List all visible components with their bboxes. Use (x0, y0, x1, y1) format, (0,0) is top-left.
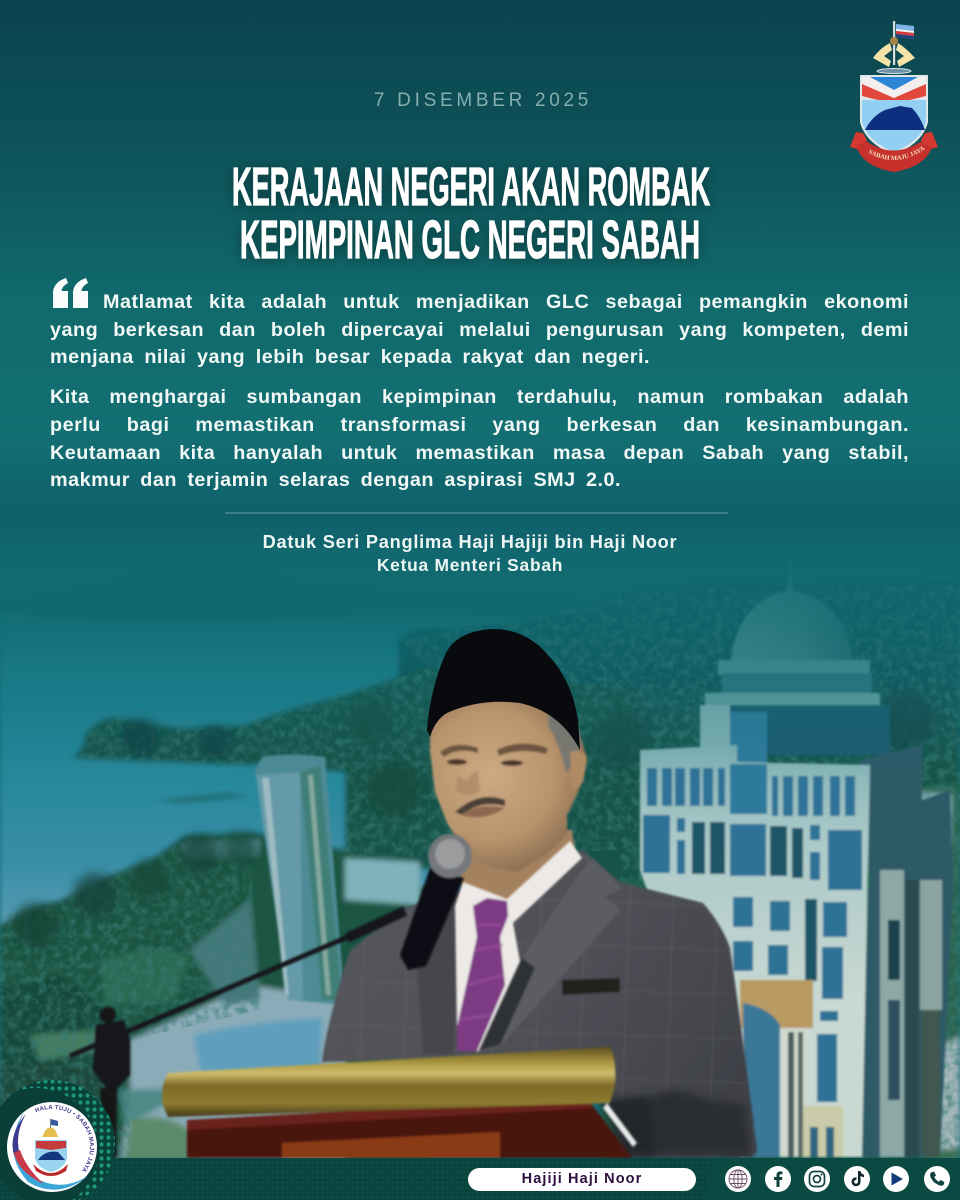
icon: quotation mark (53, 278, 88, 308)
tower: glass building (255, 754, 345, 1005)
icon: instagram (804, 1166, 830, 1192)
date: 7 DISEMBER 2025 (374, 90, 592, 111)
songkok hat (427, 629, 580, 750)
quote paragraph two: Kita menghargai sumbangan kepimpinan terdahulu, namun rombakan adalah (50, 386, 909, 408)
quote paragraph two: makmur dan terjamin selaras dengan aspirasi SMJ 2.0. (50, 469, 621, 491)
name pill: Hajiji Haji Noor (522, 1171, 642, 1187)
head (430, 692, 587, 872)
attribution role: Ketua Menteri Sabah (377, 555, 563, 575)
icon: Sabah coat of arms (850, 21, 938, 172)
neck (460, 830, 575, 902)
icon: Sabah coat of arms: SABAH MAJU JAYA (868, 146, 925, 160)
distant hills (0, 571, 620, 623)
peninsula (70, 666, 640, 880)
badge: Hala Tuju Sabah Maju Jaya (0, 1080, 115, 1200)
quote paragraph one (50, 291, 909, 368)
forest texture (0, 580, 960, 1160)
badge: Hala Tuju Sabah Maju Jaya: HALA TUJU • SABAH MAJU JAYA (34, 1104, 94, 1172)
main building (640, 558, 953, 1157)
quote paragraph one: Matlamat kita adalah untuk menjadikan GLC sebagai pemangkin ekonomi (103, 291, 909, 313)
quote paragraph one: menjana nilai yang lebih besar kepada rakyat dan negeri. (50, 346, 650, 368)
quote paragraph two (50, 386, 909, 491)
icon: tiktok (844, 1166, 870, 1192)
icon: youtube play (883, 1166, 909, 1192)
upper tier (700, 705, 890, 755)
right side landscape (905, 785, 960, 1050)
right facade (845, 745, 953, 1157)
suit jacket (322, 850, 757, 1157)
lower forest (0, 832, 430, 1160)
shirt and tie (455, 841, 582, 1052)
icon: facebook (765, 1166, 791, 1192)
icon: website globe (725, 1166, 751, 1192)
quote paragraph two: perlu bagi memastikan transformasi yang berkesan dan kesinambungan. (50, 414, 909, 436)
quote paragraph one: yang berkesan dan boleh dipercayai melalui pengurusan yang kompeten, demi (50, 318, 909, 340)
icon: small coat of arms (33, 1119, 68, 1176)
quote text block (50, 278, 909, 491)
podium (162, 1047, 637, 1158)
icon: phone (924, 1166, 950, 1192)
microphone (400, 834, 472, 970)
footer bar (0, 1158, 960, 1200)
quote paragraph two: Keutamaan kita hanyalah untuk memastikan masa depan Sabah yang stabil, (50, 442, 909, 464)
title (229, 157, 710, 270)
road and low buildings (120, 985, 345, 1160)
name pill (468, 1168, 696, 1191)
dome (787, 558, 793, 590)
attribution name: Datuk Seri Panglima Haji Hajiji bin Haji Noor (263, 532, 677, 552)
main facade (640, 745, 870, 1157)
microphone stand (70, 911, 405, 1157)
